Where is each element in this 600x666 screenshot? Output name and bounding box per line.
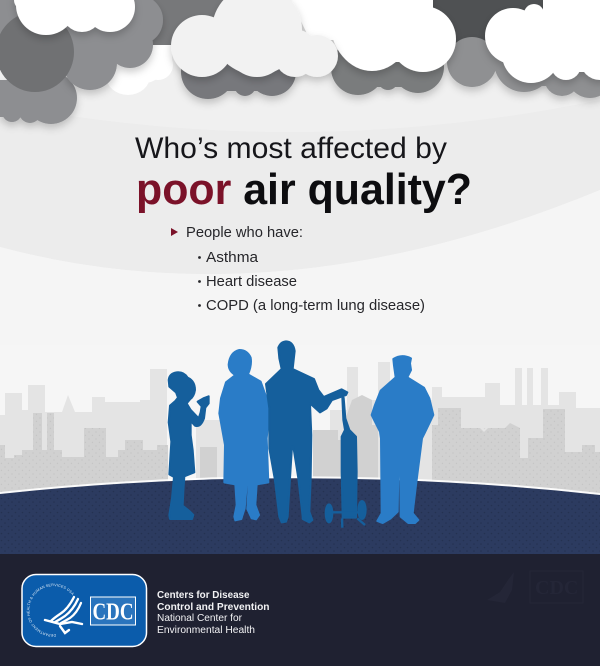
dot heart disease bbox=[198, 280, 201, 283]
tank frame bbox=[332, 512, 365, 528]
clouds bbox=[0, 0, 600, 124]
older man bbox=[372, 356, 433, 523]
list item COPD: COPD (a long-term lung disease) bbox=[206, 297, 425, 314]
agency line one: Centers for Disease bbox=[157, 590, 250, 601]
ground hill bbox=[0, 476, 600, 556]
footer band bbox=[0, 554, 600, 666]
oxygen tank bbox=[326, 398, 366, 528]
cloud: pale centre bbox=[171, 0, 338, 77]
HHS ring text: DEPARTMENT OF HEALTH & HUMAN SERVICES USA bbox=[26, 584, 74, 637]
cloud: white right bbox=[485, 0, 600, 83]
CDC logo badge bbox=[21, 574, 148, 648]
list item asthma: Asthma bbox=[206, 249, 259, 266]
agency name bbox=[157, 590, 270, 636]
cloud: grey lower right bbox=[447, 32, 600, 98]
child with inhaler bbox=[169, 372, 209, 519]
man with arm on tank bbox=[266, 341, 347, 522]
cloud: large grey left bbox=[0, 0, 163, 90]
cloud: large white centre right bbox=[291, 0, 456, 72]
cloud: dark upper right bbox=[433, 0, 545, 57]
arrow bullet bbox=[171, 228, 178, 236]
faint CDC watermark: CDC bbox=[535, 577, 578, 599]
cloud: small white left bbox=[106, 45, 173, 95]
agency line four: Environmental Health bbox=[157, 625, 255, 636]
title line one: Who’s most affected by bbox=[135, 132, 447, 165]
title line two: poor air quality? bbox=[136, 165, 472, 214]
people silhouettes bbox=[169, 341, 433, 528]
agency line three: National Center for bbox=[157, 613, 243, 624]
cloud: grey beneath right centre bbox=[331, 41, 444, 95]
tank wheels bbox=[326, 504, 332, 522]
cloud: dark ellipse bbox=[0, 12, 74, 92]
CDC box: CDC bbox=[92, 600, 134, 626]
agency line two: Control and Prevention bbox=[157, 602, 270, 613]
bulleted list bbox=[171, 224, 425, 314]
tank body bbox=[342, 398, 357, 518]
title bbox=[135, 132, 472, 214]
city skyline bbox=[0, 362, 600, 500]
cloud: white top left bbox=[14, 0, 135, 35]
list item heart disease: Heart disease bbox=[206, 273, 297, 290]
dot asthma bbox=[198, 256, 201, 259]
faint CDC watermark bbox=[487, 571, 583, 603]
woman bbox=[219, 350, 269, 520]
list heading: People who have: bbox=[186, 224, 303, 241]
HHS eagle icon bbox=[45, 597, 82, 633]
cloud: grey beneath centre bbox=[181, 45, 296, 99]
dot COPD bbox=[198, 304, 201, 307]
cloud: lower left grey bbox=[0, 72, 77, 124]
cloud: upper middle grey bbox=[150, 0, 225, 46]
